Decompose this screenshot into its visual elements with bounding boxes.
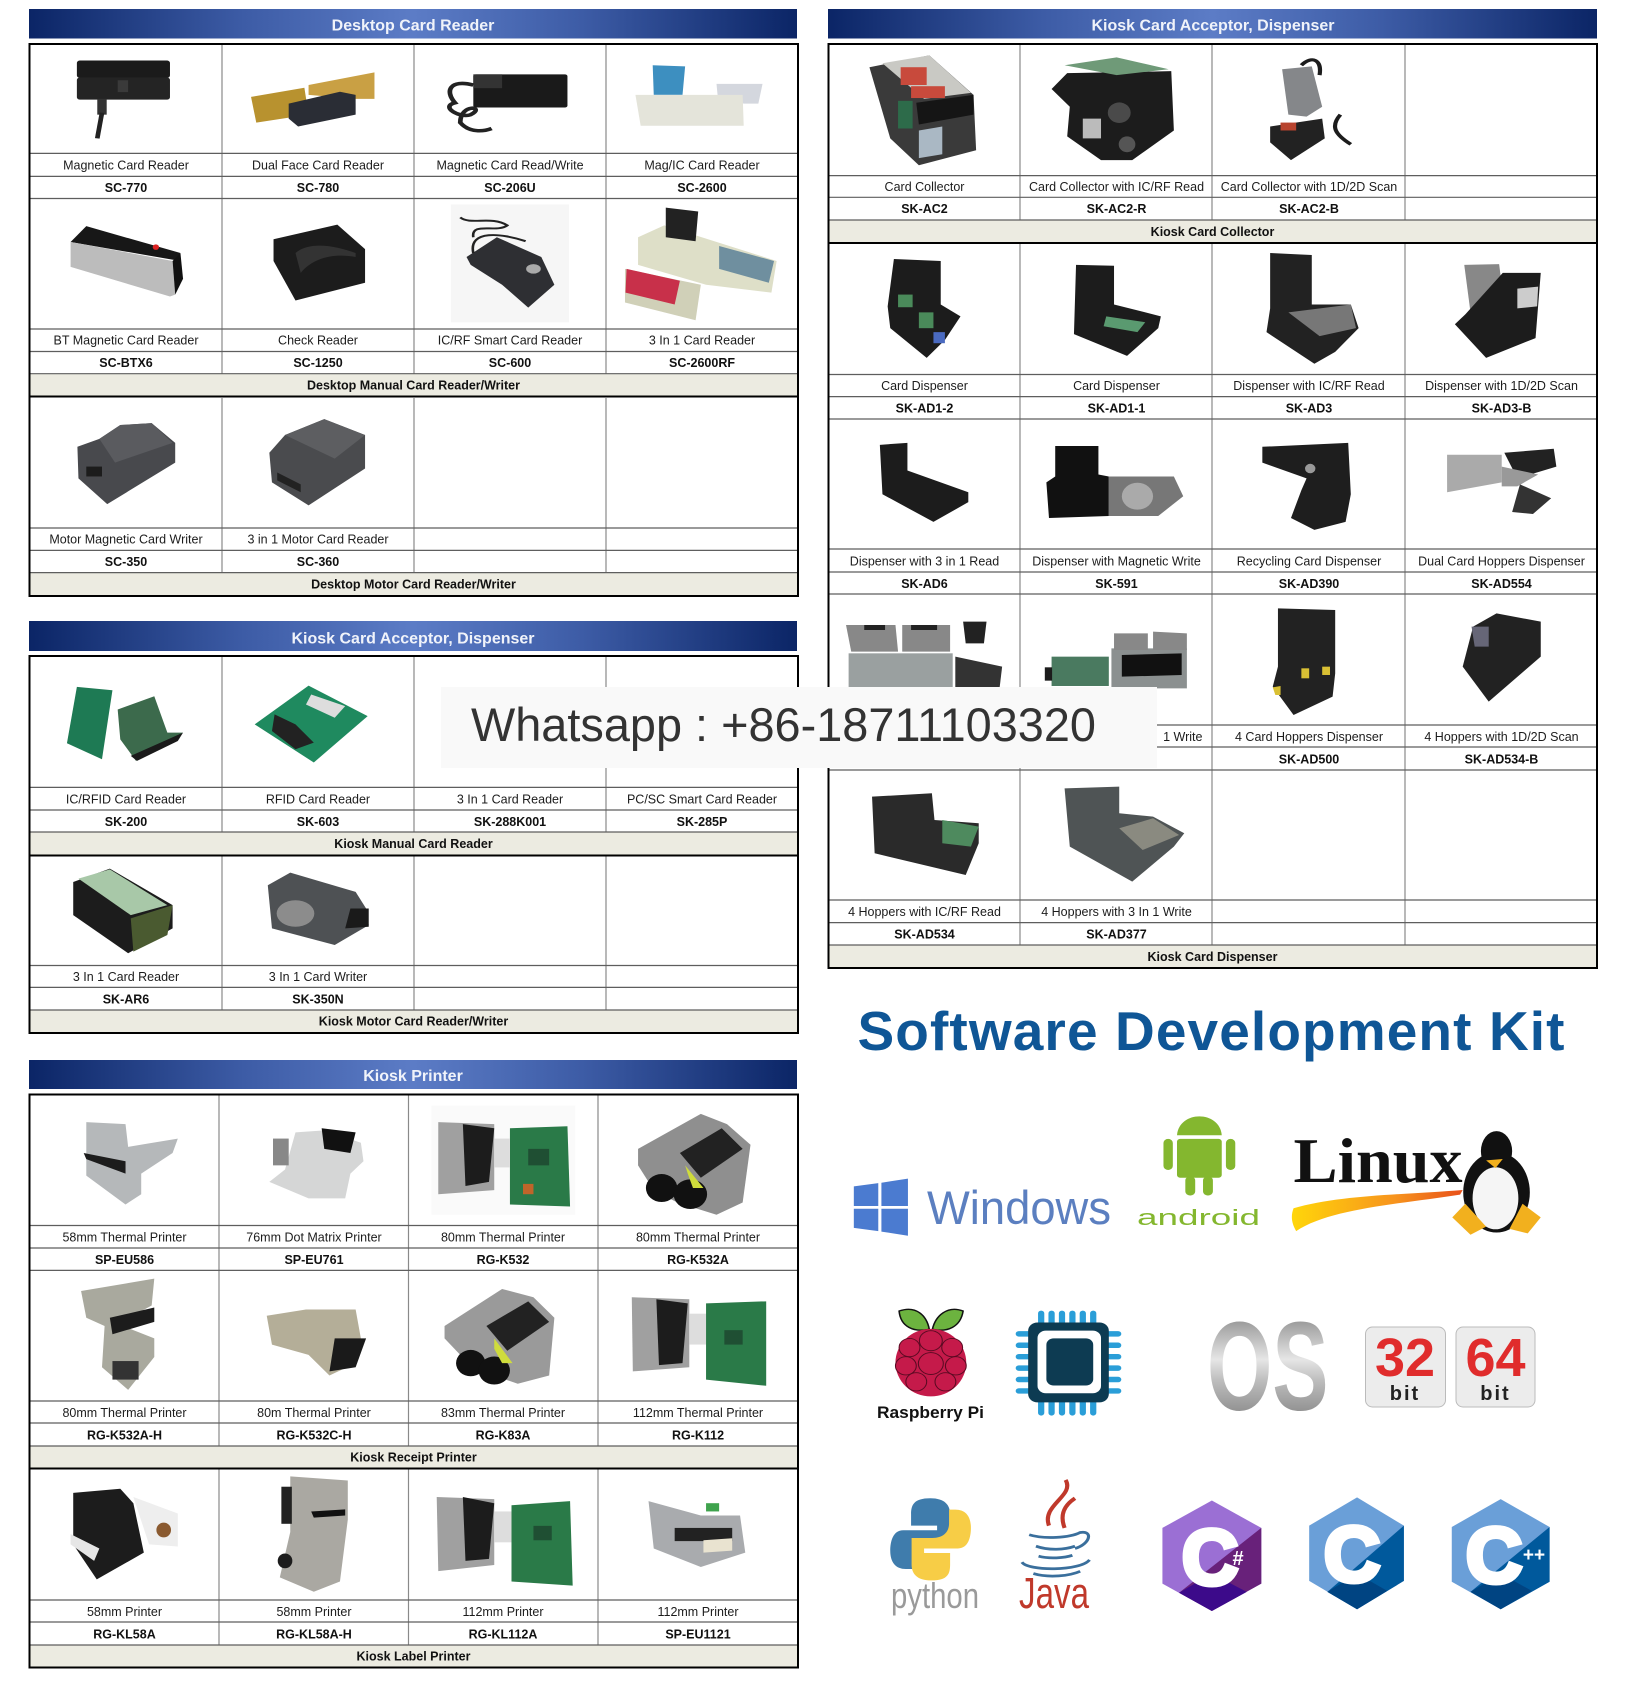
icon: mag ic card reader <box>635 65 763 126</box>
model: SK-AD3 <box>1286 402 1332 416</box>
table grid: right <box>828 44 1597 968</box>
product: SK-200 <box>66 687 186 829</box>
name: Magnetic Card Read/Write <box>436 158 584 172</box>
model: SK-285P <box>677 815 727 829</box>
name: 58mm Printer <box>87 1605 162 1619</box>
heading: kiosk card acceptor right <box>828 9 1597 38</box>
product: SC-206U <box>436 74 584 195</box>
model: SC-770 <box>105 181 147 195</box>
product: SC-2600 <box>635 65 763 195</box>
product: SC-1250 <box>274 225 365 370</box>
icon: 3 in 1 card reader module <box>73 869 173 953</box>
icon: 112mm printer with board <box>437 1497 573 1586</box>
name: 112mm Thermal Printer <box>633 1406 763 1420</box>
model: SK-AD534-B <box>1465 752 1538 766</box>
name: Card Dispenser <box>881 379 968 393</box>
model: SK-AD390 <box>1279 577 1339 591</box>
section label: Desktop Manual Card Reader/Writer <box>307 378 520 392</box>
product: SK-AC2-R <box>1029 57 1204 216</box>
model: SK-AD500 <box>1279 752 1339 766</box>
icon: dispenser with scanner <box>1455 264 1541 358</box>
product: SC-360 <box>247 419 389 569</box>
heading: kiosk card acceptor <box>29 621 797 651</box>
product: SK-AD534 <box>848 793 1001 942</box>
product: SK-288K001 <box>457 792 563 829</box>
panel: desktop card reader <box>29 9 799 596</box>
name fragment: 1 Write <box>1163 730 1203 744</box>
product: SK-AD534-B <box>1424 613 1579 766</box>
product: SC-350 <box>49 423 203 569</box>
table grid: kiosk card acceptor <box>29 656 799 1033</box>
model: RG-K83A <box>476 1428 530 1442</box>
callout: whatsapp contact: Whatsapp : +86-18711103320 <box>471 698 1096 751</box>
icon: dual card hoppers dispenser <box>1447 449 1556 514</box>
name: IC/RF Smart Card Reader <box>438 334 582 348</box>
model: SC-2600 <box>677 181 727 195</box>
icon: magnetic card read write <box>449 74 567 131</box>
model: SK-AR6 <box>103 992 149 1006</box>
heading: kiosk card acceptor right: Kiosk Card Acceptor, Dispenser <box>1091 18 1335 34</box>
model: SK-AD6 <box>901 577 948 591</box>
logo: android: android <box>1137 1205 1260 1230</box>
logo: python: python <box>891 1575 979 1616</box>
name: 3 In 1 Card Reader <box>457 792 563 806</box>
name: Dispenser with Magnetic Write <box>1032 554 1201 568</box>
icon: recycling card dispenser <box>1262 443 1351 530</box>
table grid: kiosk printer <box>29 1094 799 1668</box>
model: RG-KL112A <box>469 1628 537 1642</box>
product: SC-780 <box>251 72 384 195</box>
icon: 58mm printer with plate <box>278 1476 348 1592</box>
icon: 4 hoppers with ic rf read <box>872 793 979 875</box>
icon: 3 in 1 motor card reader <box>269 419 365 505</box>
product: SK-603 <box>255 686 370 829</box>
name: 3 In 1 Card Writer <box>269 970 367 984</box>
name: Motor Magnetic Card Writer <box>49 532 203 546</box>
model: SK-AD377 <box>1086 928 1147 942</box>
product: SC-600 <box>438 204 582 370</box>
name: BT Magnetic Card Reader <box>54 334 198 348</box>
name: 58mm Thermal Printer <box>62 1230 187 1244</box>
product: SK-AD377 <box>1041 787 1192 942</box>
section label: Desktop Motor Card Reader/Writer <box>311 578 516 592</box>
name: Card Collector with IC/RF Read <box>1029 180 1204 194</box>
product: SK-AD1-2 <box>881 259 968 416</box>
product: SC-770 <box>63 60 189 195</box>
section label: Kiosk Manual Card Reader <box>334 837 493 851</box>
logo: linux <box>1292 1125 1541 1235</box>
badge: 64 bit <box>1456 1327 1535 1407</box>
model: RG-K532A-H <box>87 1428 162 1442</box>
product: SK-AD6 <box>850 443 999 591</box>
model: SK-AD3-B <box>1472 402 1531 416</box>
name: 80mm Thermal Printer <box>441 1230 565 1244</box>
heading: kiosk printer <box>29 1060 797 1089</box>
name: Dual Face Card Reader <box>252 158 384 172</box>
product: RG-K532A-H <box>62 1279 187 1442</box>
icon: ic rfid card reader <box>67 687 183 761</box>
model: RG-K112 <box>672 1428 724 1442</box>
model: SC-2600RF <box>669 356 735 370</box>
name: 4 Hoppers with 1D/2D Scan <box>1424 730 1579 744</box>
icon: ic rf smart card reader <box>451 204 569 322</box>
logo: java: Java <box>1019 1569 1089 1618</box>
product: SK-591 <box>1032 446 1201 591</box>
icon: processor chip <box>1019 1313 1118 1413</box>
icon: 4 hoppers with 3 in 1 write <box>1065 787 1184 882</box>
name: Dispenser with 3 in 1 Read <box>850 554 999 568</box>
name: 4 Card Hoppers Dispenser <box>1235 730 1383 744</box>
table grid: desktop card reader <box>29 44 799 596</box>
heading: kiosk card acceptor: Kiosk Card Acceptor, Dispenser <box>291 630 535 648</box>
model: SK-350N <box>292 992 344 1006</box>
badge: 64 bit: 64 <box>1465 1328 1526 1388</box>
icon: 4 card hoppers dispenser <box>1273 608 1335 715</box>
name: Card Collector with 1D/2D Scan <box>1221 180 1397 194</box>
name: Card Collector <box>885 180 964 194</box>
product: SK-350N <box>268 873 369 1006</box>
model: SK-AD1-1 <box>1088 402 1145 416</box>
logo: C plus plus: C <box>1466 1511 1522 1599</box>
product: dual hopper dispenser with write <box>1045 632 1203 744</box>
badge: 32 bit: 32 <box>1375 1328 1435 1388</box>
logo: C plus plus: ++ <box>1523 1545 1545 1566</box>
logo: C sharp: C <box>1182 1513 1238 1601</box>
name: 80m Thermal Printer <box>257 1406 371 1420</box>
model: SP-EU761 <box>284 1253 344 1267</box>
name: 76mm Dot Matrix Printer <box>246 1230 382 1244</box>
name: Dual Card Hoppers Dispenser <box>1418 554 1585 568</box>
product: SK-285P <box>627 792 777 829</box>
model: SK-AC2-R <box>1087 202 1146 216</box>
product: dual hopper dispenser, partly hidden <box>846 622 1002 688</box>
model: RG-KL58A-H <box>276 1628 352 1642</box>
model: SK-200 <box>105 815 147 829</box>
icon: rfid card reader <box>255 686 368 763</box>
name: 58mm Printer <box>276 1605 352 1619</box>
product: SK-AD1-1 <box>1073 265 1161 416</box>
logo: C sharp <box>1162 1501 1261 1611</box>
model: SK-AD534 <box>894 928 955 942</box>
model: RG-KL58A <box>93 1628 156 1642</box>
icon: 112mm thermal printer with board <box>632 1297 766 1386</box>
product: SK-AD554 <box>1418 449 1585 591</box>
panel: kiosk card acceptor, dispenser (left) <box>29 621 799 1033</box>
heading: software development kit: Software Development Kit <box>858 1000 1564 1062</box>
product: SK-AD390 <box>1237 443 1381 591</box>
name: IC/RFID Card Reader <box>66 792 186 806</box>
product: SK-AC2-B <box>1221 60 1397 216</box>
name: 4 Hoppers with 3 In 1 Write <box>1041 905 1192 919</box>
product: SC-2600RF <box>625 208 777 370</box>
section label: Kiosk Motor Card Reader/Writer <box>319 1014 508 1028</box>
name: 3 In 1 Card Reader <box>649 334 755 348</box>
icon: 58mm label printer with roll <box>71 1489 178 1579</box>
logo: windows: Windows <box>927 1181 1111 1234</box>
model: SK-591 <box>1095 577 1138 591</box>
logo: OS: OS <box>1207 1296 1328 1437</box>
panel: kiosk card acceptor, dispenser (right) <box>828 9 1597 968</box>
heading: kiosk printer: Kiosk Printer <box>363 1068 463 1085</box>
model: SK-AC2 <box>901 202 948 216</box>
model: RG-K532C-H <box>276 1428 352 1442</box>
section label: Kiosk Card Dispenser <box>1148 950 1278 964</box>
model: SC-350 <box>105 555 147 569</box>
icon: dispenser with magnetic write <box>1046 446 1183 518</box>
badge: 64 bit: bit <box>1480 1383 1511 1405</box>
icon: card dispenser <box>888 259 961 358</box>
model: SC-206U <box>484 181 536 195</box>
icon: check reader <box>274 225 365 301</box>
icon: 80mm thermal printer with board <box>431 1106 575 1215</box>
name: Check Reader <box>278 334 358 348</box>
model: SC-780 <box>297 181 339 195</box>
name: Dispenser with IC/RF Read <box>1233 379 1385 393</box>
product: SK-AD3-B <box>1425 264 1578 416</box>
name: PC/SC Smart Card Reader <box>627 792 777 806</box>
icon: 58mm thermal printer <box>84 1122 178 1204</box>
section label: Kiosk Receipt Printer <box>350 1450 477 1464</box>
icon: bluetooth magnetic card reader <box>71 226 183 297</box>
model: SK-AD554 <box>1471 577 1532 591</box>
product: SK-AD500 <box>1235 608 1383 766</box>
icon: dual face card reader <box>251 72 374 127</box>
product: RG-KL58A <box>71 1489 178 1642</box>
logo: android <box>1137 1116 1260 1230</box>
name: Card Dispenser <box>1073 379 1160 393</box>
icon: card collector with scanner <box>1270 60 1351 160</box>
model: SK-AC2-B <box>1279 202 1339 216</box>
name: Magnetic Card Reader <box>63 158 189 172</box>
model: SK-603 <box>297 815 339 829</box>
icon: card dispenser <box>1074 265 1161 356</box>
name: 112mm Printer <box>462 1605 544 1619</box>
product: RG-K112 <box>632 1297 766 1442</box>
product: RG-K532 <box>431 1106 575 1267</box>
model: RG-K532A <box>667 1253 729 1267</box>
logo: C sharp: # <box>1232 1548 1244 1570</box>
logo: linux: Linux <box>1294 1125 1462 1196</box>
model: SK-288K001 <box>474 815 546 829</box>
product: SK-AR6 <box>73 869 179 1006</box>
icon: 3 in 1 card writer module <box>268 873 369 945</box>
logo: raspberry pi: Raspberry Pi <box>877 1403 984 1422</box>
logo: windows <box>854 1179 1111 1236</box>
icon: 80m thermal printer <box>267 1310 366 1375</box>
model: RG-K532 <box>477 1253 529 1267</box>
product: SK-AC2 <box>869 55 976 216</box>
icon: motor magnetic card writer <box>77 423 175 504</box>
icon: 112mm kiosk printer <box>649 1501 745 1567</box>
icon: 83mm thermal printer <box>445 1289 554 1385</box>
name: Recycling Card Dispenser <box>1237 554 1381 568</box>
logo: C <box>1309 1497 1404 1609</box>
icon: dispenser with 3 in 1 read <box>880 443 968 522</box>
name: 83mm Thermal Printer <box>441 1406 565 1420</box>
heading: desktop card reader: Desktop Card Reader <box>332 18 494 34</box>
product: RG-K532C-H <box>257 1310 371 1442</box>
section label: Kiosk Label Printer <box>357 1650 471 1664</box>
logo: java <box>1019 1480 1090 1618</box>
model: SP-EU1121 <box>665 1628 731 1642</box>
name: RFID Card Reader <box>266 792 370 806</box>
model: SC-600 <box>489 356 531 370</box>
model: SC-360 <box>297 555 339 569</box>
product: SP-EU761 <box>246 1128 382 1267</box>
logo: C: C <box>1324 1510 1380 1598</box>
product: RG-K532A <box>636 1114 760 1267</box>
icon: 4 hoppers with scanner <box>1463 613 1541 702</box>
product: RG-KL58A-H <box>276 1476 352 1642</box>
product: SC-BTX6 <box>54 226 198 370</box>
model: SC-BTX6 <box>99 356 153 370</box>
icon: hopper dispenser with write <box>1045 632 1187 688</box>
product: SK-AD3 <box>1233 253 1385 416</box>
logo: raspberry pi <box>877 1309 984 1422</box>
section label: Kiosk Card Collector <box>1151 225 1274 239</box>
icon: hopper dispenser with scanner <box>846 622 1002 688</box>
panel: kiosk printer <box>29 1060 799 1668</box>
model: SC-1250 <box>293 356 343 370</box>
model: SK-AD1-2 <box>896 402 953 416</box>
name: 112mm Printer <box>657 1605 739 1619</box>
heading: desktop card reader <box>29 9 797 38</box>
name: 3 in 1 Motor Card Reader <box>247 532 389 546</box>
icon: 3 in 1 card reader <box>625 208 777 320</box>
icon: 80mm thermal printer with housing <box>81 1279 154 1390</box>
icon: magnetic card reader <box>77 60 170 138</box>
name: 4 Hoppers with IC/RF Read <box>848 905 1001 919</box>
name: 80mm Thermal Printer <box>62 1406 187 1420</box>
logo: C plus plus <box>1452 1499 1550 1609</box>
logo: python <box>890 1498 979 1616</box>
name: 80mm Thermal Printer <box>636 1230 760 1244</box>
icon: card collector <box>869 55 976 165</box>
name: Dispenser with 1D/2D Scan <box>1425 379 1578 393</box>
product: RG-K83A <box>441 1289 565 1442</box>
name: Mag/IC Card Reader <box>644 158 760 172</box>
icon: dispenser with ic rf read <box>1267 253 1359 364</box>
icon: 76mm dot matrix printer <box>269 1128 363 1198</box>
badge: 32 bit <box>1366 1327 1446 1407</box>
name: 3 In 1 Card Reader <box>73 970 179 984</box>
product: SP-EU1121 <box>649 1501 745 1642</box>
callout: whatsapp contact <box>441 687 1157 768</box>
badge: 32 bit: bit <box>1390 1383 1420 1405</box>
icon: 80mm thermal printer <box>638 1114 751 1215</box>
model: SP-EU586 <box>95 1253 154 1267</box>
product: RG-KL112A <box>437 1497 573 1642</box>
icon: card collector with ic rf read <box>1052 57 1174 160</box>
product: SP-EU586 <box>62 1122 187 1267</box>
